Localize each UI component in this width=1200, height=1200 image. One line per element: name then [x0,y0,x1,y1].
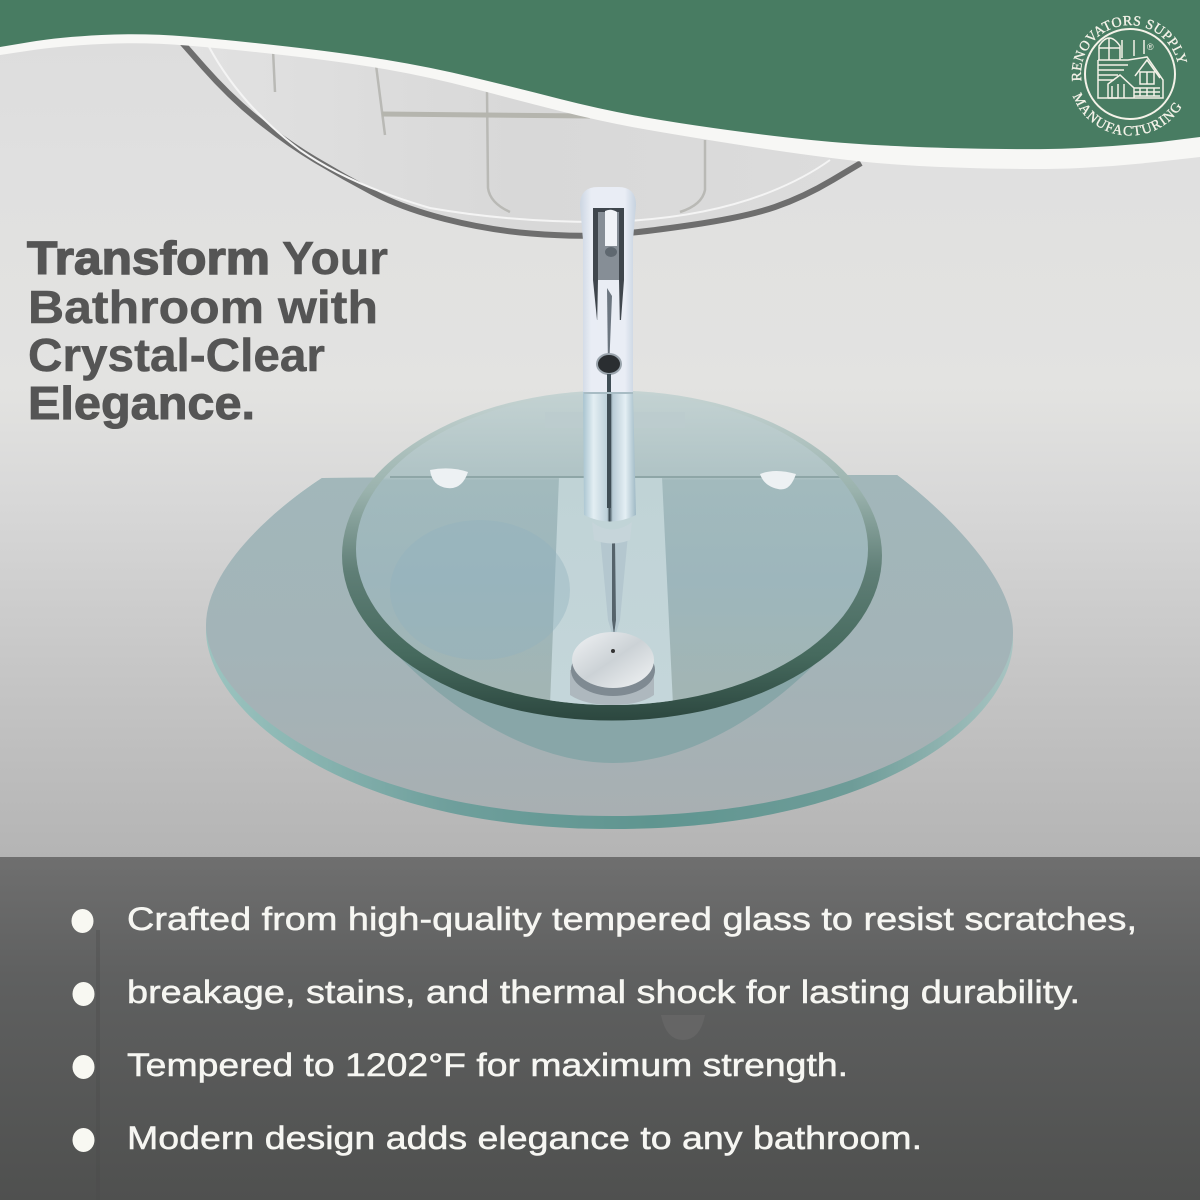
round mirror [178,30,861,236]
green shape [0,0,1200,149]
headline: Your: Your [282,232,388,284]
bullet 2: breakage, stains, and thermal shock for lasting durability. [127,974,1080,1010]
glass vessel bowl [342,390,882,763]
headline: Transform: Transform [27,232,270,284]
green header banner [0,0,1200,169]
bowl underside [372,625,850,763]
bullet 3: Tempered to 1202°F for maximum strength. [127,1047,848,1083]
bowl rim [342,390,882,720]
pop-up drain [570,632,655,705]
registered mark: ® [1147,42,1154,52]
logo: Renovators Supply Manufacturing [1072,16,1188,136]
faucet window [593,208,624,320]
faucet upper body [580,187,636,392]
ghost basin reflection [661,1015,705,1040]
faucet lower body [583,392,636,522]
photo background wall [0,0,1200,860]
headline: Elegance.: Elegance. [28,377,255,429]
faucet reflection [592,522,632,640]
bullet 1: Crafted from high-quality tempered glass to resist scratches, [127,901,1137,937]
glass shelf [206,475,1013,829]
chrome faucet [580,187,636,522]
bottom info panel [0,857,1200,1200]
reflected bracket left [430,468,468,488]
bullet 4: Modern design adds elegance to any bathroom. [127,1120,922,1156]
headline [27,232,388,429]
logo ring text bottom: MANUFACTURING [1072,92,1182,136]
reflected bracket right [760,471,796,489]
logo ring text top: RENOVATORS SUPPLY [1072,16,1188,82]
bowl interior [356,393,868,705]
headline: Crystal-Clear: Crystal-Clear [28,329,325,381]
white wave [0,0,1200,169]
logo house [1098,38,1163,98]
headline: Bathroom with: Bathroom with [28,281,378,333]
reflected centre strip [550,477,673,705]
aerator hole [597,354,621,374]
